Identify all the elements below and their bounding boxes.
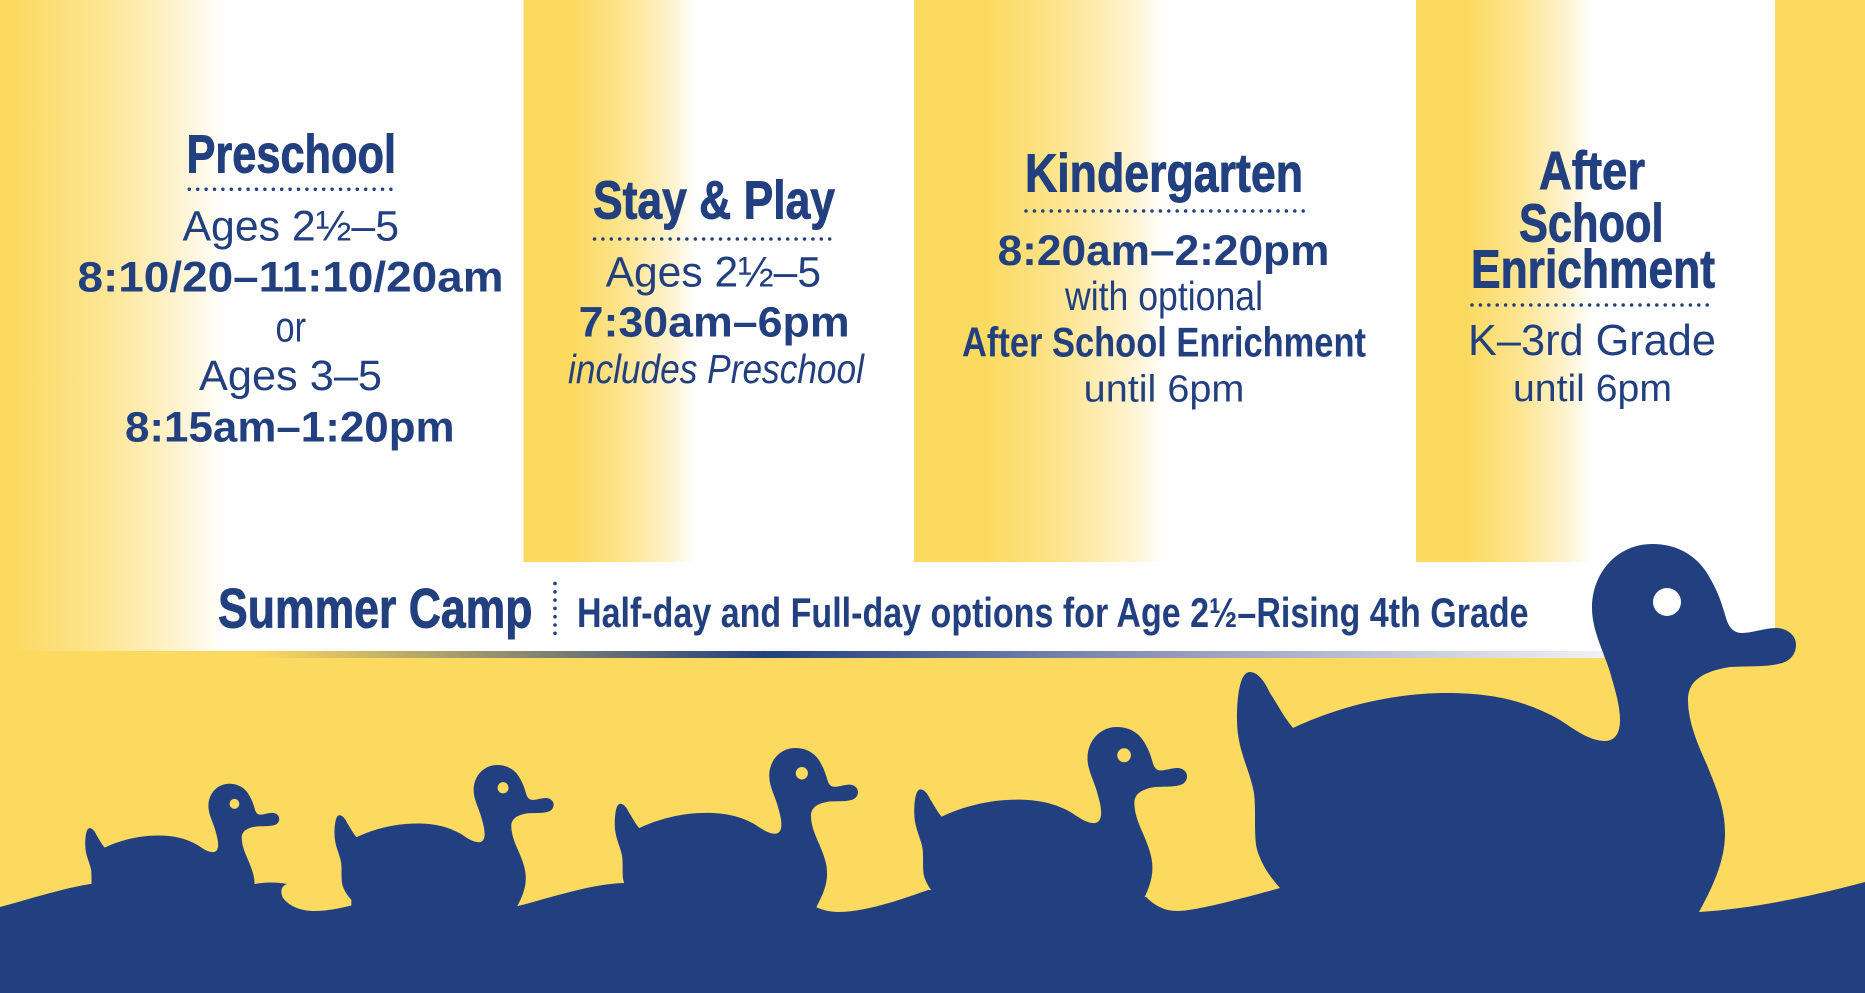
heading: school: School bbox=[1519, 194, 1664, 254]
text: preschool ages 3-5: Ages 3–5 bbox=[199, 352, 382, 400]
text: K-3rd grade: K–3rd Grade bbox=[1468, 316, 1716, 365]
icon: duckling 1 bbox=[85, 784, 279, 919]
panel: after school enrichment bbox=[1468, 141, 1716, 410]
divider: preschool bbox=[189, 188, 396, 191]
text: until 6pm: until 6pm bbox=[1084, 369, 1244, 411]
column stripe: preschool and summer camp bbox=[0, 0, 226, 651]
heading: after: After bbox=[1539, 141, 1645, 201]
icon: big duck bbox=[1237, 544, 1796, 935]
heading: kindergarten: Kindergarten bbox=[1025, 144, 1303, 204]
divider: stay and play bbox=[594, 237, 835, 241]
panel: kindergarten bbox=[962, 144, 1366, 411]
panel: preschool bbox=[78, 125, 504, 452]
text: summer camp details: Half-day and Full-day options for Age 2½–Rising 4th Grade bbox=[577, 589, 1529, 636]
text: after school enrichment: After School Enrichment bbox=[962, 319, 1366, 366]
column stripe: stay and play bbox=[524, 0, 696, 562]
text: preschool half-day time: 8:10/20–11:10/20am bbox=[78, 254, 504, 302]
text: preschool ages: Ages 2½–5 bbox=[182, 203, 399, 251]
panel: summer camp bbox=[218, 576, 1529, 639]
text: or: or bbox=[276, 304, 306, 352]
vertical dotted divider bbox=[553, 584, 557, 635]
heading: stay and play: Stay & Play bbox=[593, 170, 835, 230]
divider: kindergarten bbox=[1026, 209, 1305, 213]
heading: summer camp: Summer Camp bbox=[218, 576, 532, 639]
text: stay and play time: 7:30am–6pm bbox=[579, 299, 850, 347]
icon: duckling 2 bbox=[335, 765, 554, 918]
water waves bbox=[0, 882, 1865, 993]
text: stay and play ages: Ages 2½–5 bbox=[606, 249, 821, 297]
column stripe: after school bbox=[1416, 0, 1591, 562]
white panel area bbox=[0, 0, 1775, 651]
column stripe: kindergarten bbox=[914, 0, 1166, 562]
text: until 6pm: until 6pm bbox=[1513, 368, 1672, 410]
text: kindergarten time: 8:20am–2:20pm bbox=[998, 227, 1329, 275]
text: preschool extended time: 8:15am–1:20pm bbox=[125, 404, 455, 452]
text: includes preschool: includes Preschool bbox=[568, 346, 866, 392]
divider: after school bbox=[1472, 303, 1715, 307]
text: with optional: with optional bbox=[1064, 273, 1263, 319]
icon: duckling 3 bbox=[615, 748, 858, 918]
heading: preschool: Preschool bbox=[186, 125, 396, 185]
heading: enrichment: Enrichment bbox=[1471, 240, 1715, 300]
panel: stay and play bbox=[568, 170, 866, 392]
gradient rule under summer camp bbox=[255, 651, 1604, 658]
icon: duckling 4 bbox=[914, 727, 1187, 918]
